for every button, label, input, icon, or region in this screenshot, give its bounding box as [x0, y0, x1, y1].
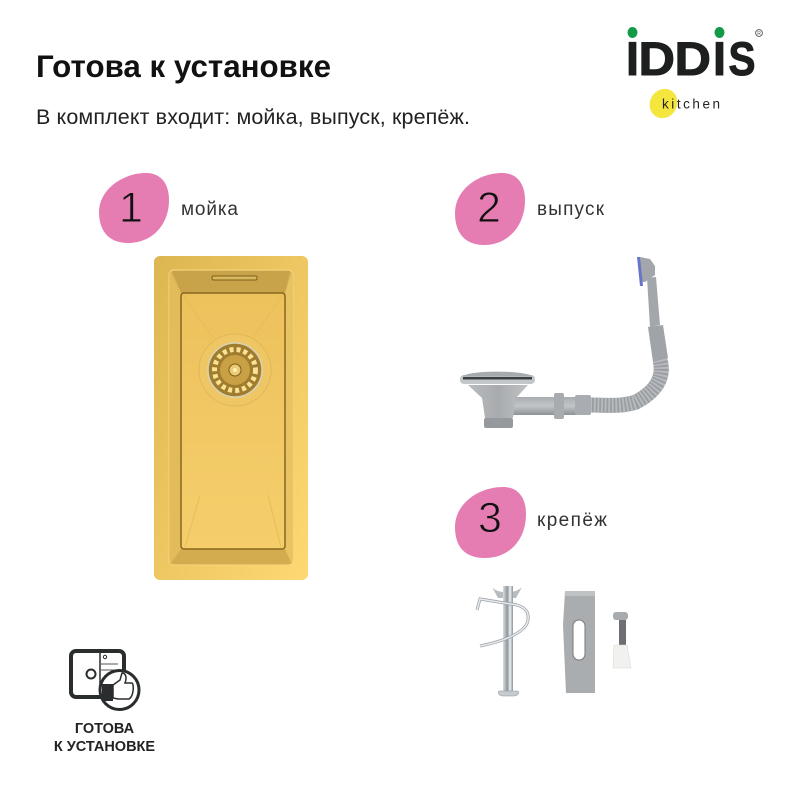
logo: IDDIS kitchen [626, 27, 762, 123]
icon caption: К УСТАНОВКЕ [54, 739, 155, 755]
logo: IDDIS kitchen: D [638, 32, 675, 85]
logo: IDDIS kitchen: R [757, 31, 761, 37]
logo: IDDIS kitchen: kitchen [662, 96, 720, 112]
step 1 label: мойка [181, 199, 238, 220]
icon caption [54, 721, 155, 755]
logo: IDDIS kitchen: I [713, 32, 726, 85]
step 2 badge: 2 [477, 184, 501, 232]
step 1 badge: 1 [119, 184, 143, 232]
subtitle: В комплект входит: мойка, выпуск, крепёж. [36, 105, 470, 129]
title: Готова к установке [36, 48, 331, 84]
logo: IDDIS kitchen: S [728, 32, 756, 85]
step 3 label: крепёж [537, 510, 607, 531]
step 3 badge: 3 [478, 494, 502, 542]
step 3 badge [455, 487, 526, 558]
fasteners [477, 586, 631, 696]
sink [154, 256, 308, 580]
step 2 badge [455, 173, 525, 245]
drain kit [460, 257, 668, 428]
logo: IDDIS kitchen: D [674, 32, 711, 85]
step 1 badge [99, 173, 169, 243]
icon: ready to install [71, 651, 139, 710]
icon caption: ГОТОВА [75, 721, 135, 737]
step 2 label: выпуск [537, 199, 605, 220]
logo: IDDIS kitchen: I [626, 32, 639, 85]
